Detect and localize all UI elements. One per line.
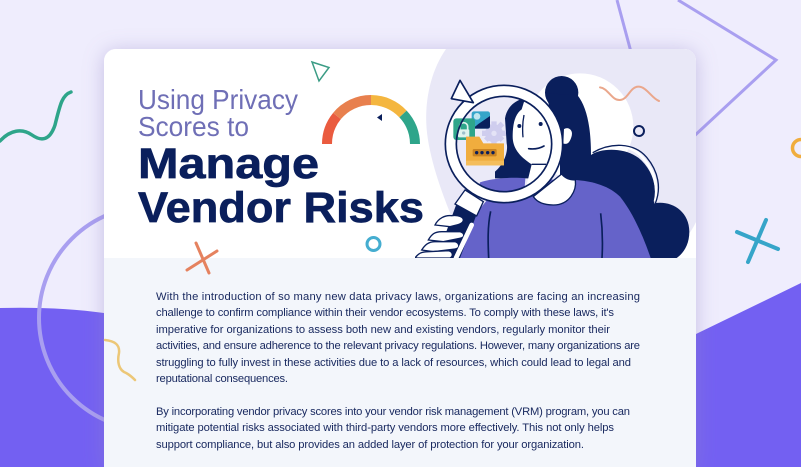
thumb xyxy=(456,225,472,258)
hand xyxy=(415,216,464,258)
title light lines: Scores to xyxy=(138,111,249,142)
title bold lines xyxy=(138,140,424,232)
lavender backdrop xyxy=(426,49,696,233)
body text xyxy=(156,291,640,451)
outline circle xyxy=(39,206,263,430)
eyes xyxy=(517,124,521,128)
title bold lines: Vendor Risks xyxy=(138,184,424,232)
blue ring xyxy=(367,238,380,250)
card header xyxy=(104,49,696,258)
paragraph two: support compliance, but also provides an added layer of protection for your organization. xyxy=(156,439,584,451)
orange ring xyxy=(792,140,801,156)
paragraph one: activities, and ensure adherence to the relevant privacy regulations. However, many organizations are xyxy=(156,340,640,352)
lens inner outline xyxy=(456,96,552,192)
mouth xyxy=(529,146,544,149)
sweater xyxy=(459,179,651,258)
teal triangle xyxy=(312,62,329,81)
lens glass xyxy=(457,97,528,186)
small ring xyxy=(634,126,644,136)
title light lines xyxy=(138,84,298,142)
orange cross xyxy=(187,243,217,273)
white arrow triangle xyxy=(451,80,473,103)
face and neck xyxy=(512,102,551,185)
orange folder icon xyxy=(466,137,504,165)
paragraph one: struggling to fully invest in these activities due to a lack of resources, which could lead to legal and xyxy=(156,357,631,369)
paragraph two xyxy=(156,406,630,451)
gauge needle xyxy=(377,114,382,121)
folder bottom band xyxy=(466,161,504,165)
header white band xyxy=(104,49,696,258)
lens ring xyxy=(445,85,563,203)
password dots xyxy=(473,149,497,156)
paragraph one: imperative for organizations to assess both new and existing vendors, regularly monitor their xyxy=(156,324,610,336)
magnifier handle xyxy=(446,205,476,258)
card surface xyxy=(104,49,696,467)
sweater in lens xyxy=(480,178,526,191)
blue card icon xyxy=(472,111,490,129)
gauge xyxy=(327,100,415,144)
collar xyxy=(533,174,575,205)
eyebrow and nose xyxy=(523,115,524,137)
illustration: woman with magnifying glass xyxy=(415,73,689,258)
paragraph one: reputational consequences. xyxy=(156,373,288,385)
paragraph one: With the introduction of so many new data privacy laws, organizations are facing an increasing xyxy=(156,291,640,303)
paragraph one: challenge to confirm compliance within their vendor ecosystems. To comply with these laws, it's xyxy=(156,307,614,319)
sweater folds xyxy=(488,211,602,258)
title bold lines: Manage xyxy=(138,140,319,188)
card xyxy=(104,49,696,467)
outline triangle xyxy=(617,0,776,138)
green lock icon xyxy=(453,118,475,140)
gear icon xyxy=(482,121,506,145)
teal squiggle xyxy=(0,92,71,141)
title xyxy=(138,84,424,232)
ear xyxy=(564,128,572,144)
orange squiggle xyxy=(600,87,659,101)
hair xyxy=(545,76,689,258)
paragraph two: By incorporating vendor privacy scores into your vendor risk management (VRM) program, you can xyxy=(156,406,630,418)
yellow squiggle xyxy=(105,340,135,380)
title light lines: Using Privacy xyxy=(138,84,298,115)
paragraph two: mitigate potential risks associated with third-party vendors more effectively. This not only helps xyxy=(156,422,614,434)
white circle backdrop xyxy=(538,74,634,176)
chin line xyxy=(532,164,546,165)
lens contents xyxy=(457,97,546,191)
paragraph one xyxy=(156,291,640,385)
hair in lens xyxy=(495,99,535,178)
hair highlight xyxy=(628,148,658,202)
blue cross xyxy=(737,220,778,262)
purple ground shape xyxy=(0,283,801,467)
